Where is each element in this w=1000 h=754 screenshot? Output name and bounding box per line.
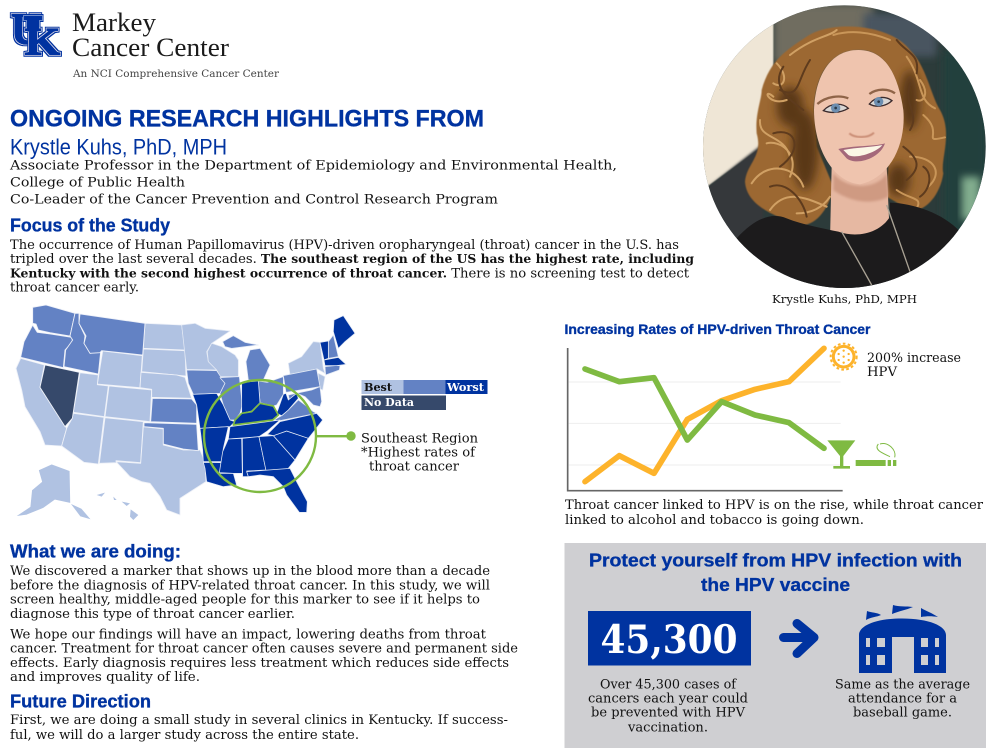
text block: future direction bbox=[10, 713, 508, 743]
hair bbox=[745, 26, 946, 225]
callout: southeast region bbox=[361, 432, 478, 474]
text block: focus of the study: Kentucky with the second highest occurrence of throat cancer. There is no screening test to detect bbox=[10, 265, 690, 281]
map legend: No Data bbox=[364, 395, 415, 409]
face bbox=[814, 50, 904, 184]
text: 45,300 explanation: be prevented with HPV bbox=[591, 706, 745, 720]
chart label: 200% increase HPV: 200% increase bbox=[867, 351, 961, 366]
text: baseball comparison: baseball game. bbox=[853, 706, 952, 720]
title: ONGOING RESEARCH HIGHLIGHTS FROM bbox=[10, 106, 484, 132]
map legend: Worst bbox=[446, 380, 485, 394]
series: alcohol and tobacco-linked bbox=[585, 369, 824, 448]
state outline: Kentucky bbox=[233, 403, 278, 425]
logo: University of Kentucky Markey Cancer Center: Cancer Center bbox=[72, 33, 229, 62]
heading: line chart: Increasing Rates of HPV-driven Throat Cancer bbox=[564, 322, 871, 337]
icon: stadium bbox=[859, 605, 946, 673]
panel heading bbox=[589, 550, 962, 595]
legend: no data bbox=[362, 396, 446, 410]
text block: what we are doing, second paragraph: and improves quality of life. bbox=[10, 670, 200, 685]
chart label: 200% increase HPV: HPV bbox=[867, 365, 897, 380]
researcher affiliation bbox=[9, 158, 617, 208]
chart caption bbox=[565, 498, 984, 528]
text: baseball comparison: attendance for a bbox=[848, 692, 957, 706]
icon: cigarette bbox=[856, 444, 896, 466]
top bbox=[737, 203, 967, 293]
western states bbox=[15, 305, 206, 520]
logo mark: UK: K bbox=[25, 20, 61, 64]
text block: focus of the study: throat cancer early. bbox=[10, 281, 139, 296]
hair shadows bbox=[777, 70, 920, 197]
heading: future direction: Future Direction bbox=[10, 692, 151, 712]
legend: middle bbox=[404, 380, 446, 394]
researcher affiliation: College of Public Health bbox=[10, 176, 186, 190]
line chart: HPV vs alcohol and tobacco throat cancer bbox=[568, 344, 896, 491]
neck bbox=[830, 168, 889, 234]
chart caption: linked to alcohol and tobacco is going down. bbox=[565, 513, 864, 528]
text: baseball comparison bbox=[835, 678, 970, 720]
heading: what we are doing: What we are doing: bbox=[10, 542, 181, 562]
central and eastern states bbox=[182, 316, 355, 512]
callout: southeast region: throat cancer bbox=[369, 460, 460, 474]
text block: what we are doing, first paragraph: diagnose this type of throat cancer earlier. bbox=[10, 607, 295, 622]
text block: what we are doing, second paragraph: We hope our findings will have an impact, lowering deaths from throat bbox=[10, 628, 487, 642]
callout connector bbox=[316, 431, 356, 441]
series: HPV-linked bbox=[585, 348, 824, 482]
text block: focus of the study: tripled over the last several decades. The southeast region of the US has the highest rate, including bbox=[10, 251, 694, 267]
panel heading: Protect yourself from HPV infection with bbox=[589, 550, 962, 570]
text block: focus of the study bbox=[10, 238, 694, 296]
state: Nevada, no data bbox=[40, 365, 79, 427]
logo tagline: An NCI Comprehensive Cancer Center bbox=[72, 68, 280, 80]
map legend: Best bbox=[364, 380, 393, 394]
text block: future direction: First, we are doing a small study in several clinics in Kentucky. If success- bbox=[10, 713, 508, 728]
icon: virus bbox=[831, 344, 857, 370]
text block: what we are doing, first paragraph bbox=[10, 564, 490, 622]
map legend bbox=[362, 380, 488, 410]
panel heading: the HPV vaccine bbox=[701, 574, 850, 595]
highlight circle: southeast region bbox=[204, 380, 316, 492]
text block: what we are doing, first paragraph: We discovered a marker that shows up in the blood more than a decade bbox=[10, 564, 490, 579]
text: 45,300 explanation bbox=[588, 678, 749, 736]
stat box: 45,300: 45,300 bbox=[600, 617, 738, 663]
logo mark: UK: U bbox=[11, 4, 41, 54]
researcher affiliation: Associate Professor in the Department of Epidemiology and Environmental Health, bbox=[9, 158, 617, 174]
legend: best bbox=[362, 380, 404, 394]
researcher name: Krystle Kuhs, PhD, MPH bbox=[10, 134, 227, 160]
photo caption: Krystle Kuhs, PhD, MPH bbox=[772, 293, 917, 306]
nose bbox=[849, 133, 874, 137]
icon: martini glass bbox=[827, 440, 855, 469]
researcher affiliation: Co-Leader of the Cancer Prevention and Control Research Program bbox=[10, 192, 499, 208]
logo mark: UK bbox=[11, 4, 61, 64]
text: 45,300 explanation: Over 45,300 cases of bbox=[600, 678, 737, 692]
text: 45,300 explanation: vaccination. bbox=[627, 720, 708, 736]
text block: what we are doing, first paragraph: screen healthy, middle-aged people for this marker to see if it helps to bbox=[10, 592, 480, 608]
text: 45,300 explanation: cancers each year could bbox=[588, 692, 749, 706]
text block: future direction: ful, we will do a larger study across the entire state. bbox=[10, 728, 359, 743]
text block: what we are doing, first paragraph: before the diagnosis of HPV-related throat cancer. In this study, we will bbox=[10, 578, 490, 594]
text block: what we are doing, second paragraph: effects. Early diagnosis requires less treatment which reduces side effects bbox=[10, 656, 509, 671]
callout: southeast region: *Highest rates of bbox=[361, 446, 476, 460]
text block: what we are doing, second paragraph bbox=[10, 628, 518, 685]
chart label: 200% increase HPV bbox=[867, 351, 961, 380]
photo: Krystle Kuhs portrait bbox=[700, 3, 990, 293]
text block: what we are doing, second paragraph: cancer. Treatment for throat cancer often causes severe and permanent side bbox=[10, 642, 518, 656]
text block: focus of the study: The occurrence of Human Papillomavirus (HPV)-driven oropharyngeal (throat) cancer in the U.S. has bbox=[10, 238, 679, 253]
heading: focus of the study: Focus of the Study bbox=[10, 216, 170, 236]
panel: HPV vaccine bbox=[564, 543, 986, 748]
logo: University of Kentucky Markey Cancer Center bbox=[11, 4, 280, 80]
logo wordmark: Markey bbox=[72, 8, 156, 37]
text: baseball comparison: Same as the average bbox=[835, 678, 970, 692]
chart caption: Throat cancer linked to HPV is on the rise, while throat cancer bbox=[565, 498, 984, 513]
necklace bbox=[842, 205, 910, 285]
callout: southeast region: Southeast Region bbox=[361, 432, 478, 446]
neck shadow bbox=[833, 173, 888, 202]
map: US rates of throat cancer by state bbox=[15, 305, 356, 520]
eyes bbox=[823, 104, 848, 112]
legend: worst bbox=[446, 380, 488, 394]
smile bbox=[838, 143, 885, 161]
icon: arrow bbox=[784, 624, 814, 654]
